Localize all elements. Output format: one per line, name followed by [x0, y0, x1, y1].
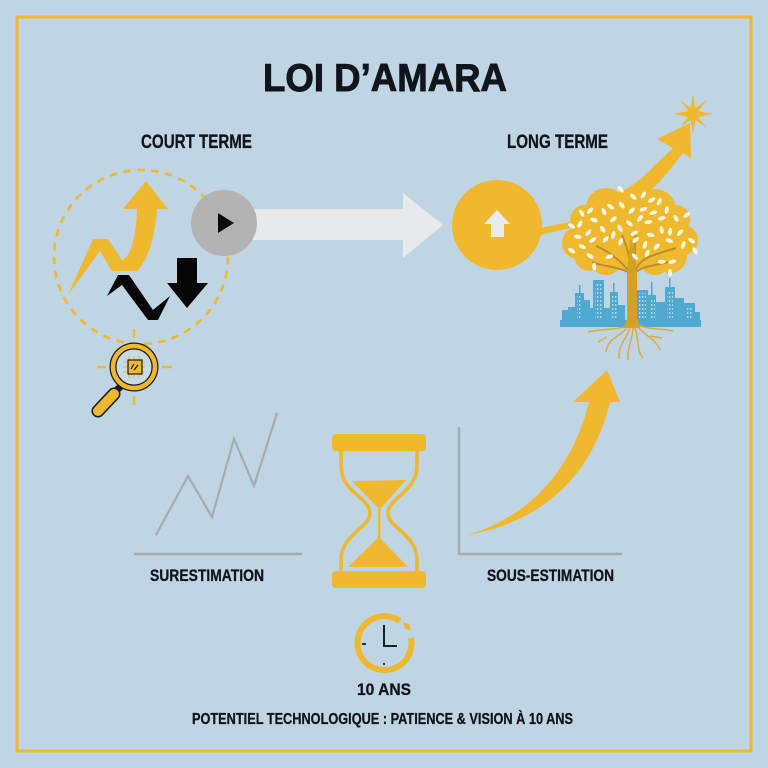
connector: circle to tree — [540, 222, 570, 235]
icon: rising yellow zigzag arrow — [68, 181, 168, 295]
label: surestimation: SURESTIMATION — [150, 566, 264, 585]
leaves — [567, 185, 699, 277]
city skyline — [560, 278, 701, 327]
arrow: long-term rising arrow — [625, 123, 691, 194]
crown of tree — [562, 188, 698, 275]
icon: black down arrow — [167, 258, 208, 308]
icon: play button — [191, 190, 257, 256]
footer caption: POTENTIEL TECHNOLOGIQUE : PATIENCE & VISION À 10 ANS — [192, 711, 573, 728]
chart: overestimation zigzag — [134, 413, 302, 554]
arrow: large horizontal white arrow — [250, 193, 443, 258]
heading: long terme: LONG TERME — [507, 132, 608, 153]
illustration: tree over city — [560, 185, 701, 360]
branches — [592, 232, 676, 272]
title: LOI D’AMARA — [263, 57, 507, 100]
label: 10 ans: 10 ANS — [357, 680, 411, 699]
label: sous-estimation: SOUS-ESTIMATION — [487, 566, 614, 585]
icon: clock — [357, 616, 411, 670]
icon: star burst — [673, 94, 713, 134]
arrow: underestimation exponential curve — [468, 370, 620, 535]
icon: yellow circle with up arrow — [452, 180, 542, 270]
dashed circle: short-term scope — [54, 170, 228, 344]
chart: underestimation axes — [459, 427, 622, 554]
icon: hourglass — [332, 434, 426, 588]
heading: court terme: COURT TERME — [141, 132, 252, 153]
roots — [588, 325, 673, 360]
icon: falling black zigzag — [107, 275, 170, 320]
icon: magnifying glass with chip — [97, 329, 172, 411]
trunk — [624, 240, 640, 328]
